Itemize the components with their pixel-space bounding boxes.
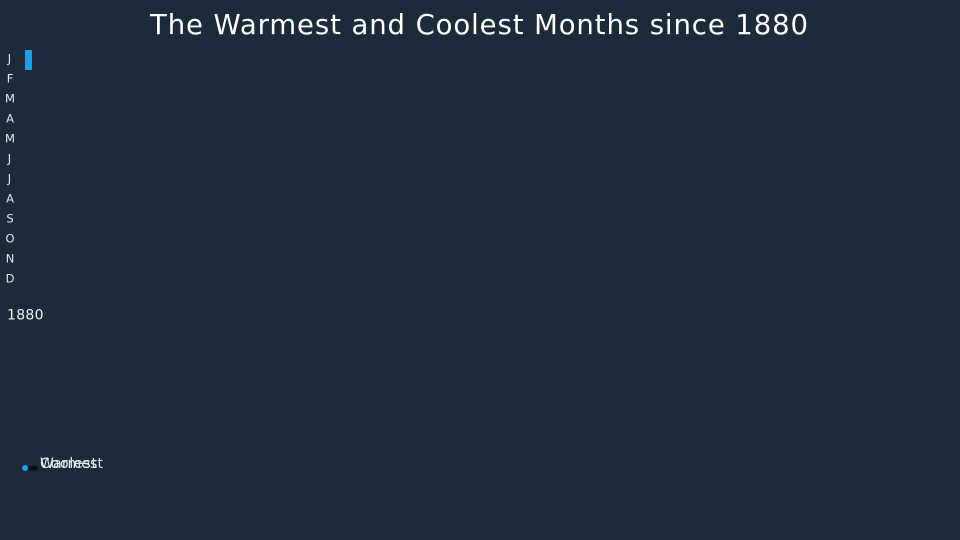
month labels: M <box>5 92 15 106</box>
month labels: A <box>6 112 14 126</box>
legend label: warmest: Warmest <box>40 456 104 472</box>
month labels: D <box>6 272 15 286</box>
month labels: F <box>7 72 13 86</box>
legend <box>22 456 104 472</box>
month labels: N <box>6 252 14 266</box>
month labels: A <box>6 192 14 206</box>
month labels: S <box>6 212 14 226</box>
month labels: J <box>7 172 11 186</box>
title: The Warmest and Coolest Months since 1880 <box>149 9 808 41</box>
month labels: O <box>5 232 15 246</box>
bar: January 1880 <box>25 50 32 70</box>
month labels <box>5 52 15 286</box>
month labels: J <box>7 152 11 166</box>
year label: 1880 <box>7 308 44 324</box>
legend label: coolest: Coolest <box>40 456 98 472</box>
legend marker: warmest <box>22 465 28 471</box>
month labels: M <box>5 132 15 146</box>
month labels: J <box>7 52 11 66</box>
legend marker: coolest <box>28 466 38 470</box>
